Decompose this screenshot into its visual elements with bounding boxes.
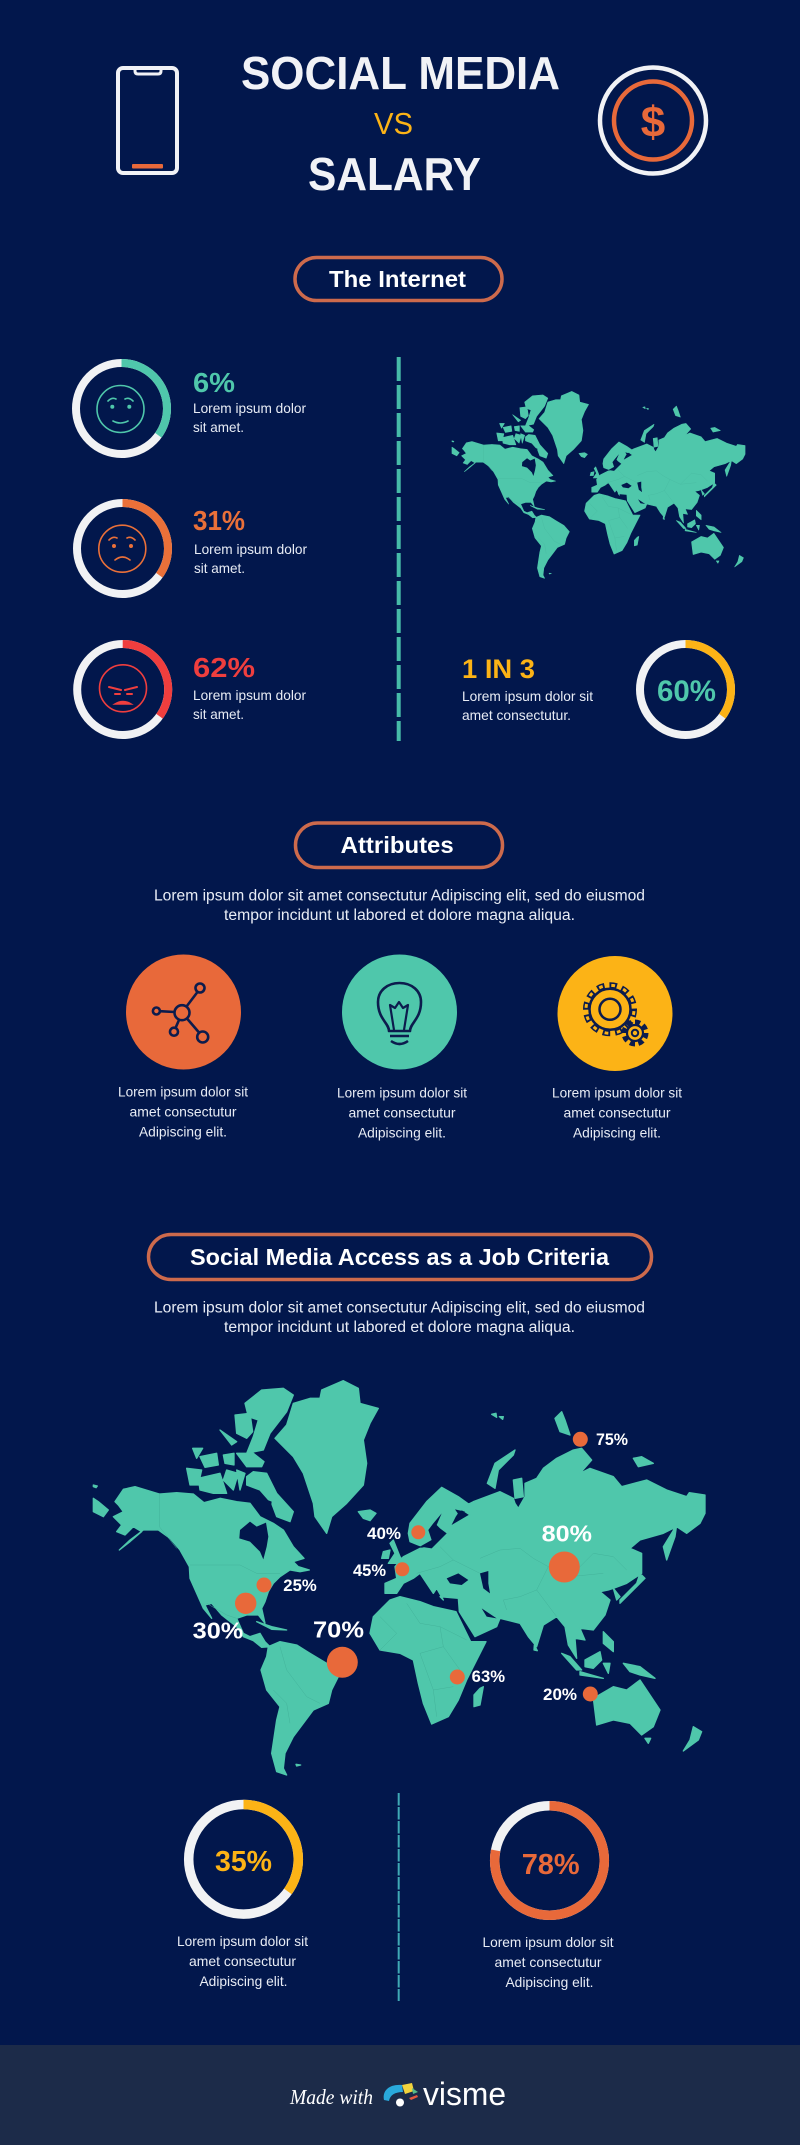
marker: 25%: 25% [283, 1577, 317, 1595]
stat: 6%: sit amet. [193, 419, 244, 435]
text: bulb caption: amet consectutur [348, 1105, 456, 1121]
marker: 45%: 45% [353, 1562, 386, 1580]
text: attributes intro: Lorem ipsum dolor sit amet consectutur Adipiscing elit, sed do eiusmod [154, 888, 645, 905]
marker: 63% [450, 1668, 505, 1686]
small world map [452, 391, 745, 578]
footer: Made with [289, 2085, 373, 2109]
icon: phone [118, 68, 177, 173]
text: gears caption: Lorem ipsum dolor sit [552, 1085, 682, 1101]
marker: 63%: 63% [472, 1668, 505, 1686]
stat: 62%: 62% [193, 652, 255, 683]
stat: 1 in 3: amet consectutur. [462, 707, 571, 723]
footer: visme [423, 2076, 506, 2112]
heading: Social Media Access as a Job Criteria: Social Media Access as a Job Criteria [190, 1244, 609, 1270]
donut: 78%: 78% [522, 1849, 580, 1881]
text: 35% caption: Adipiscing elit. [200, 1973, 288, 1989]
text: 78% caption: Lorem ipsum dolor sit [482, 1934, 614, 1950]
title: SALARY [308, 148, 481, 200]
text: attributes intro [154, 888, 645, 924]
donut: 35% [189, 1804, 298, 1914]
marker: 45% [353, 1562, 409, 1580]
marker: 30% [193, 1593, 256, 1643]
donut: 78% [495, 1806, 604, 1915]
heading: Attributes: Attributes [341, 832, 454, 858]
stat: 31%: sit amet. [194, 560, 245, 576]
text: network caption: Lorem ipsum dolor sit [118, 1084, 248, 1100]
stat: 6%: Lorem ipsum dolor [193, 400, 306, 416]
heading: The Internet: The Internet [329, 266, 466, 292]
stat: 31%: Lorem ipsum dolor [194, 541, 307, 557]
donut: 60% [640, 644, 731, 735]
text: 35% caption: amet consectutur [189, 1953, 296, 1969]
stat: 62% [77, 644, 306, 735]
text: bulb caption: Lorem ipsum dolor sit [337, 1085, 467, 1101]
text: network caption: amet consectutur [130, 1104, 237, 1120]
marker: 75% [573, 1431, 628, 1449]
text: 78% caption: amet consectutur [494, 1954, 602, 1970]
marker: 40% [367, 1525, 425, 1543]
icon: dollar coin: $ [641, 98, 665, 147]
title: VS [374, 106, 413, 141]
marker: 20% [543, 1686, 598, 1704]
marker: 75%: 75% [596, 1431, 628, 1449]
text: job criteria intro [154, 1300, 645, 1336]
icon: light bulb [342, 954, 457, 1070]
icon: dollar coin [600, 68, 706, 174]
heading: Social Media Access as a Job Criteria [148, 1234, 652, 1280]
text: gears caption: amet consectutur [564, 1105, 671, 1121]
text: job criteria intro: tempor incidunt ut labored et dolore magna aliqua. [224, 1319, 575, 1336]
stat: 62%: Lorem ipsum dolor [193, 687, 306, 703]
large world map [93, 1381, 705, 1775]
text: 78% caption: Adipiscing elit. [506, 1974, 594, 1990]
title: SOCIAL MEDIA [241, 47, 560, 99]
heading: Attributes [296, 823, 502, 868]
stat: 62%: sit amet. [193, 706, 244, 722]
stat: 6% [76, 363, 306, 454]
marker: 80%: 80% [542, 1521, 592, 1547]
stat: 1 in 3: Lorem ipsum dolor sit [462, 688, 593, 704]
donut: 35%: 35% [215, 1846, 272, 1878]
stat: 1 in 3 [462, 654, 593, 723]
text: gears caption: Adipiscing elit. [573, 1125, 661, 1141]
stat: 31% [77, 503, 307, 594]
stat: 31%: 31% [193, 505, 245, 536]
text: 35% caption [177, 1933, 308, 1989]
text: network caption: Adipiscing elit. [139, 1124, 227, 1140]
text: network caption [118, 1084, 248, 1140]
icon: network [126, 954, 241, 1070]
footer [0, 2045, 800, 2145]
stat: 1 in 3: 1 IN 3 [462, 654, 535, 684]
marker: 70%: 70% [313, 1617, 364, 1643]
marker: 40%: 40% [367, 1525, 401, 1543]
marker: 70% [313, 1617, 364, 1678]
text: 35% caption: Lorem ipsum dolor sit [177, 1933, 308, 1949]
marker: 30%: 30% [193, 1617, 243, 1643]
marker: 80% [542, 1521, 592, 1582]
donut: 60%: 60% [657, 675, 716, 708]
title [241, 47, 560, 200]
marker: 20%: 20% [543, 1686, 577, 1704]
text: bulb caption: Adipiscing elit. [358, 1125, 446, 1141]
marker: 25% [256, 1577, 317, 1595]
stat: 6%: 6% [193, 367, 235, 398]
text: gears caption [552, 1085, 682, 1141]
text: bulb caption [337, 1085, 467, 1141]
text: attributes intro: tempor incidunt ut labored et dolore magna aliqua. [224, 907, 575, 924]
text: job criteria intro: Lorem ipsum dolor sit amet consectutur Adipiscing elit, sed do eiusmod [154, 1300, 645, 1317]
heading: The Internet [295, 258, 502, 300]
text: 78% caption [482, 1934, 614, 1990]
icon: gears [558, 956, 672, 1071]
